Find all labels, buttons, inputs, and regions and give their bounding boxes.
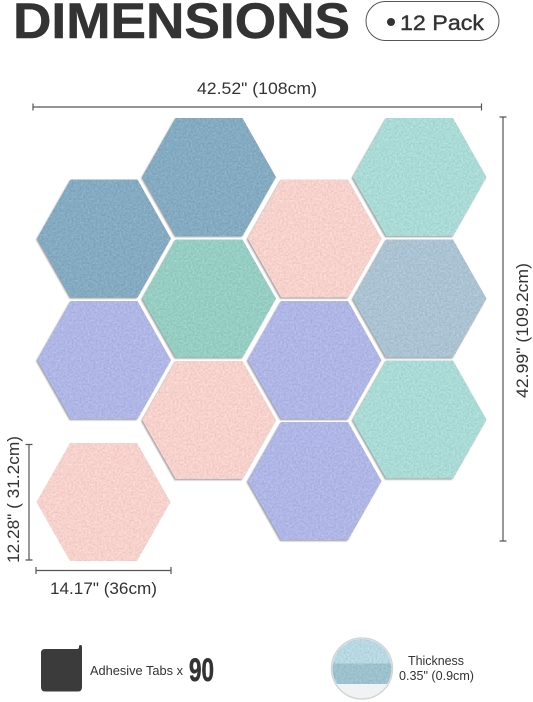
- single height dimension: 12.28 in: [5, 436, 32, 563]
- hexagon: teal center: [142, 240, 276, 358]
- single width dimension: 14.17 in: [36, 567, 171, 598]
- height dimension: 42.99 in: 42.99" (109.2cm): [514, 263, 532, 398]
- hexagon: aqua top right: [352, 118, 486, 236]
- hexagon: grey blue right: [352, 240, 486, 358]
- hexagon: blue left: [37, 180, 171, 298]
- adhesive tabs label: [90, 652, 214, 688]
- width dimension: 42.52 in: [33, 80, 482, 110]
- single width dimension: 14.17 in: 14.17" (36cm): [50, 580, 157, 598]
- adhesive tabs label: 90: [189, 652, 214, 688]
- height dimension: 42.99 in: [500, 117, 532, 541]
- hexagon: single pink sample: [36, 443, 170, 561]
- thickness label: [399, 654, 474, 683]
- badge: 12 Pack: [366, 2, 499, 40]
- hexagon: blue top: [142, 118, 276, 236]
- adhesive tabs label: Adhesive Tabs x: [90, 664, 184, 678]
- thickness label: 0.35" (0.9cm): [399, 669, 474, 683]
- hexagon: lavender center: [248, 301, 382, 419]
- hexagon: lavender bottom: [248, 422, 382, 540]
- thickness label: Thickness: [408, 654, 464, 668]
- hexagon panels: [36, 118, 486, 561]
- hexagon: pink upper: [248, 180, 382, 298]
- single height dimension: 12.28 in: 12.28" ( 31.2cm): [5, 436, 23, 563]
- hexagon: aqua lower right: [352, 360, 486, 478]
- hexagon: pink lower: [142, 361, 276, 479]
- badge: 12 Pack: 12 Pack: [400, 12, 485, 35]
- icon: adhesive tab: [41, 645, 82, 692]
- width dimension: 42.52 in: 42.52" (108cm): [197, 80, 317, 98]
- hexagon: lavender left: [37, 301, 171, 419]
- icon: thickness circle: [330, 636, 394, 699]
